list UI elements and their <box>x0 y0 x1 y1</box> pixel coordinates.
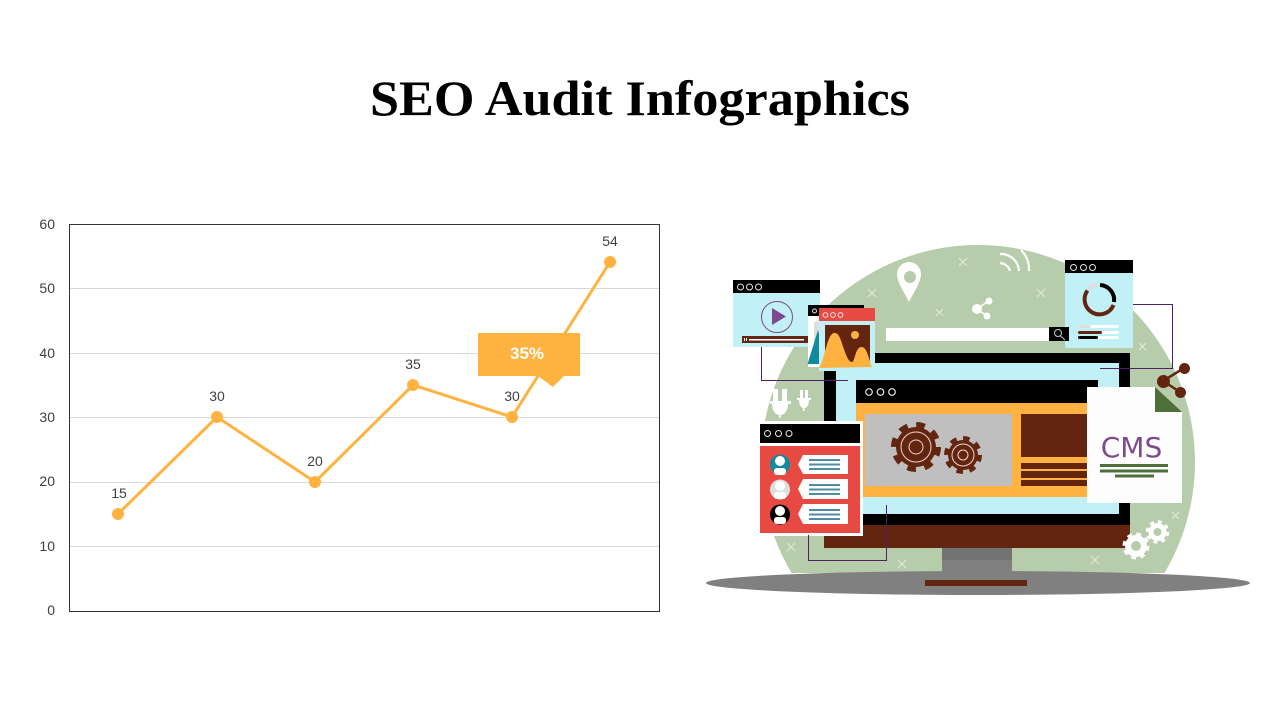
line chart <box>39 216 660 618</box>
data labels: 54 <box>602 233 618 249</box>
CMS document: CMS <box>1101 431 1162 464</box>
icon: large brown gear <box>895 426 937 468</box>
icon: brown share <box>1157 363 1190 398</box>
monitor body <box>824 353 1130 586</box>
ground shadow <box>706 571 1250 595</box>
window behind image card <box>808 305 864 367</box>
title: SEO Audit Infographics <box>370 70 910 126</box>
data labels <box>111 233 618 501</box>
icon: white plugs <box>770 389 811 418</box>
user row 3 <box>770 504 848 524</box>
icon: location pin <box>897 262 921 302</box>
icon: white share <box>972 298 992 319</box>
callout: 35% <box>478 333 580 387</box>
purple connector lines <box>762 304 1172 560</box>
y axis labels: 30 <box>39 409 55 425</box>
video player window <box>733 280 820 347</box>
icon: white gears <box>1124 522 1168 558</box>
data line <box>118 262 610 514</box>
search bar <box>886 327 1069 341</box>
callout: 35%: 35% <box>510 344 544 363</box>
icon: small brown gear <box>947 439 979 471</box>
user row 2 <box>770 479 848 500</box>
data labels: 20 <box>307 453 323 469</box>
y axis labels <box>39 216 55 618</box>
donut chart <box>1085 285 1114 314</box>
y axis labels: 20 <box>39 473 55 489</box>
illustration: SEO audit monitor <box>706 245 1250 595</box>
user row 1 <box>770 454 848 475</box>
data labels: 30 <box>504 388 520 404</box>
green circle background <box>765 245 1195 573</box>
inner browser window <box>856 380 1098 497</box>
y axis labels: 60 <box>39 216 55 232</box>
y axis labels: 10 <box>39 538 55 554</box>
y axis labels: 0 <box>47 602 55 618</box>
decorative crosses <box>787 258 1179 568</box>
users list window <box>759 421 863 536</box>
image card <box>819 308 875 371</box>
data labels: 15 <box>111 485 127 501</box>
data labels: 35 <box>405 356 421 372</box>
icon: wifi arcs <box>1000 250 1029 271</box>
y axis labels: 50 <box>39 280 55 296</box>
data markers <box>112 256 616 520</box>
analytics window <box>1065 260 1133 348</box>
data labels: 30 <box>209 388 225 404</box>
y axis labels: 40 <box>39 345 55 361</box>
CMS document <box>1087 387 1182 503</box>
